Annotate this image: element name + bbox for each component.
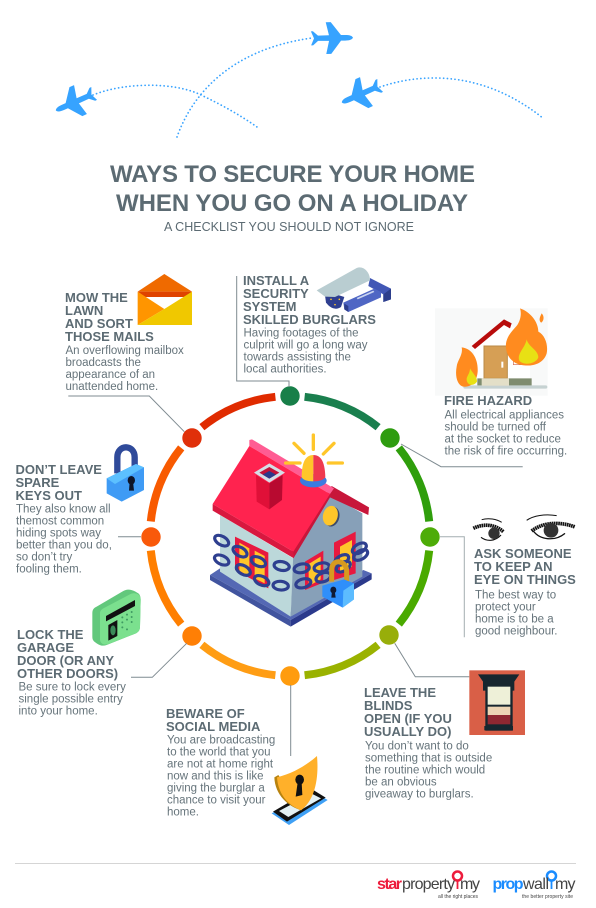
icon: security camera	[317, 267, 391, 312]
panel: lock the garage door: GARAGE	[17, 640, 74, 655]
panel: mow the lawn: appearance of an	[66, 369, 155, 381]
panel: mow the lawn: LAWN	[65, 303, 103, 318]
logo: starproperty: my	[460, 876, 480, 893]
footer divider and logos	[15, 864, 576, 900]
panel: don't leave spare keys out: better than you do,	[16, 539, 112, 551]
panel: lock the garage door: OTHER DOORS)	[17, 666, 118, 681]
chimney	[254, 463, 285, 509]
panel: don't leave spare keys out	[16, 447, 144, 575]
panel: lock the garage door: DOOR (OR ANY	[17, 653, 114, 668]
panel: install a security system: culprit will go a long way	[244, 340, 368, 352]
icon: pair of eyes	[473, 515, 575, 540]
logo: propwall: wall	[522, 876, 549, 893]
icon: shield on phone	[272, 756, 328, 825]
subtitle: A CHECKLIST YOU SHOULD NOT IGNORE	[164, 220, 414, 234]
panel: mow the lawn: MOW THE	[65, 290, 128, 305]
panel: install a security system: INSTALL A	[243, 273, 310, 288]
panel: lock the garage door	[17, 590, 141, 717]
panel: fire hazard: All electrical appliances	[444, 410, 564, 422]
panel: leave the blinds open: something that is outside	[365, 752, 492, 764]
panel: ask someone: home is to be a	[475, 613, 554, 625]
panel: leave the blinds open: BLINDS	[364, 698, 413, 713]
panel: don't leave spare keys out: fooling them.	[16, 563, 82, 575]
panel: fire hazard: at the socket to reduce	[444, 434, 561, 446]
panel: ask someone: TO KEEP AN	[474, 559, 553, 574]
panel: beware of social media: home.	[167, 807, 199, 819]
panel: beware of social media: BEWARE OF	[166, 706, 245, 721]
panel: ask someone: protect your	[475, 601, 536, 613]
panel: fire hazard: the risk of fire occurring.	[444, 446, 567, 458]
panel: install a security system: SYSTEM	[243, 299, 296, 314]
panel: ask someone: good neighbour.	[475, 625, 558, 637]
logo: propwall: prop	[492, 876, 524, 893]
panel: install a security system: SKILLED BURGLARS	[243, 312, 376, 327]
panel: beware of social media: to the world that you	[167, 747, 271, 759]
panel: leave the blinds open	[364, 670, 525, 800]
panel: beware of social media: You are broadcasting	[167, 735, 275, 747]
windows	[235, 532, 356, 590]
panel: don't leave spare keys out: They also know all	[16, 503, 111, 515]
central house illustration	[210, 435, 372, 627]
panel: beware of social media: giving the burglar a	[167, 783, 265, 795]
title	[110, 161, 475, 234]
house base	[210, 568, 372, 627]
icon: burning house	[435, 308, 548, 396]
panel: install a security system	[243, 267, 391, 376]
panel: install a security system: Having footages of the	[244, 328, 359, 340]
panel: fire hazard: FIRE HAZARD	[444, 393, 532, 408]
panel: install a security system: local authorities.	[244, 364, 327, 376]
panel: don't leave spare keys out: DON’T LEAVE	[16, 462, 102, 477]
panel: leave the blinds open: giveaway to burglars.	[365, 788, 474, 800]
panel: don't leave spare keys out: SPARE	[16, 475, 60, 490]
logo: propwall	[492, 872, 576, 900]
logo: starproperty: star	[377, 876, 402, 893]
panel: don't leave spare keys out: hiding spots way	[16, 527, 101, 539]
panel: leave the blinds open: LEAVE THE	[364, 685, 436, 700]
panel: leave the blinds open: USUALLY DO)	[364, 724, 451, 739]
logo: starproperty: property	[402, 876, 455, 893]
panel: beware of social media: now and this is like	[167, 771, 264, 783]
panel: ask someone: EYE ON THINGS	[474, 572, 576, 587]
panel: leave the blinds open: OPEN (IF YOU	[364, 711, 452, 726]
icon: blue padlock	[107, 447, 144, 502]
panel: lock the garage door: single possible entry	[18, 693, 123, 705]
panel: lock the garage door: into your home.	[18, 705, 98, 717]
panel: leave the blinds open: You don’t want to do	[365, 740, 469, 752]
icon: right airplane	[335, 71, 387, 117]
panel: mow the lawn	[65, 274, 192, 393]
siren light	[286, 435, 342, 487]
icon: envelope	[138, 274, 192, 325]
panel: fire hazard	[435, 308, 567, 458]
panel: beware of social media: SOCIAL MEDIA	[166, 719, 261, 734]
panel: don't leave spare keys out: themost common	[16, 515, 104, 527]
panel: mow the lawn: An overflowing mailbox	[66, 345, 184, 357]
chains	[213, 533, 369, 591]
round attic window	[321, 504, 342, 528]
panel: fire hazard: should be turned off	[444, 422, 547, 434]
logo: starproperty	[377, 872, 480, 900]
panel: don't leave spare keys out: so don’t try	[16, 551, 72, 563]
panel: mow the lawn: AND SORT	[65, 316, 133, 331]
icon: green keypad	[92, 590, 141, 646]
padlock on chain	[322, 562, 354, 608]
house walls	[220, 495, 362, 617]
panel: leave the blinds open: be an obvious	[365, 776, 437, 788]
panel: ask someone	[473, 515, 576, 637]
panel: leave the blinds open: the routine which would	[365, 764, 485, 776]
logo: propwall: my	[555, 876, 576, 893]
icon: middle airplane	[311, 22, 353, 54]
roof	[213, 439, 369, 558]
panel: ask someone: The best way to	[475, 589, 556, 601]
panel: ask someone: ASK SOMEONE	[474, 546, 572, 561]
icon: window with blinds	[469, 670, 525, 735]
panel: install a security system: SECURITY	[243, 286, 309, 301]
panel: don't leave spare keys out: KEYS OUT	[16, 488, 82, 503]
panel: lock the garage door: Be sure to lock every	[18, 681, 126, 693]
panel: beware of social media: chance to visit your	[167, 795, 266, 807]
panel: install a security system: towards assisting the	[244, 352, 351, 364]
logo: starproperty: all the right places	[438, 894, 478, 900]
panel: mow the lawn: broadcasts the	[66, 357, 141, 369]
panel: mow the lawn: unattended home.	[66, 381, 158, 393]
flight paths and airplanes	[49, 22, 544, 137]
icon: left airplane	[49, 79, 101, 125]
ring of eight coloured arcs with nodes	[141, 386, 440, 686]
panel: beware of social media	[166, 706, 328, 825]
panel: mow the lawn: THOSE MAILS	[65, 329, 154, 344]
title: WHEN YOU GO ON A HOLIDAY	[116, 190, 468, 217]
title: WAYS TO SECURE YOUR HOME	[110, 161, 475, 188]
connector lines	[68, 276, 523, 756]
panel: beware of social media: are not at home right	[167, 759, 274, 771]
panel: lock the garage door: LOCK THE	[17, 627, 84, 642]
logo: propwall: the better property site	[522, 894, 573, 900]
